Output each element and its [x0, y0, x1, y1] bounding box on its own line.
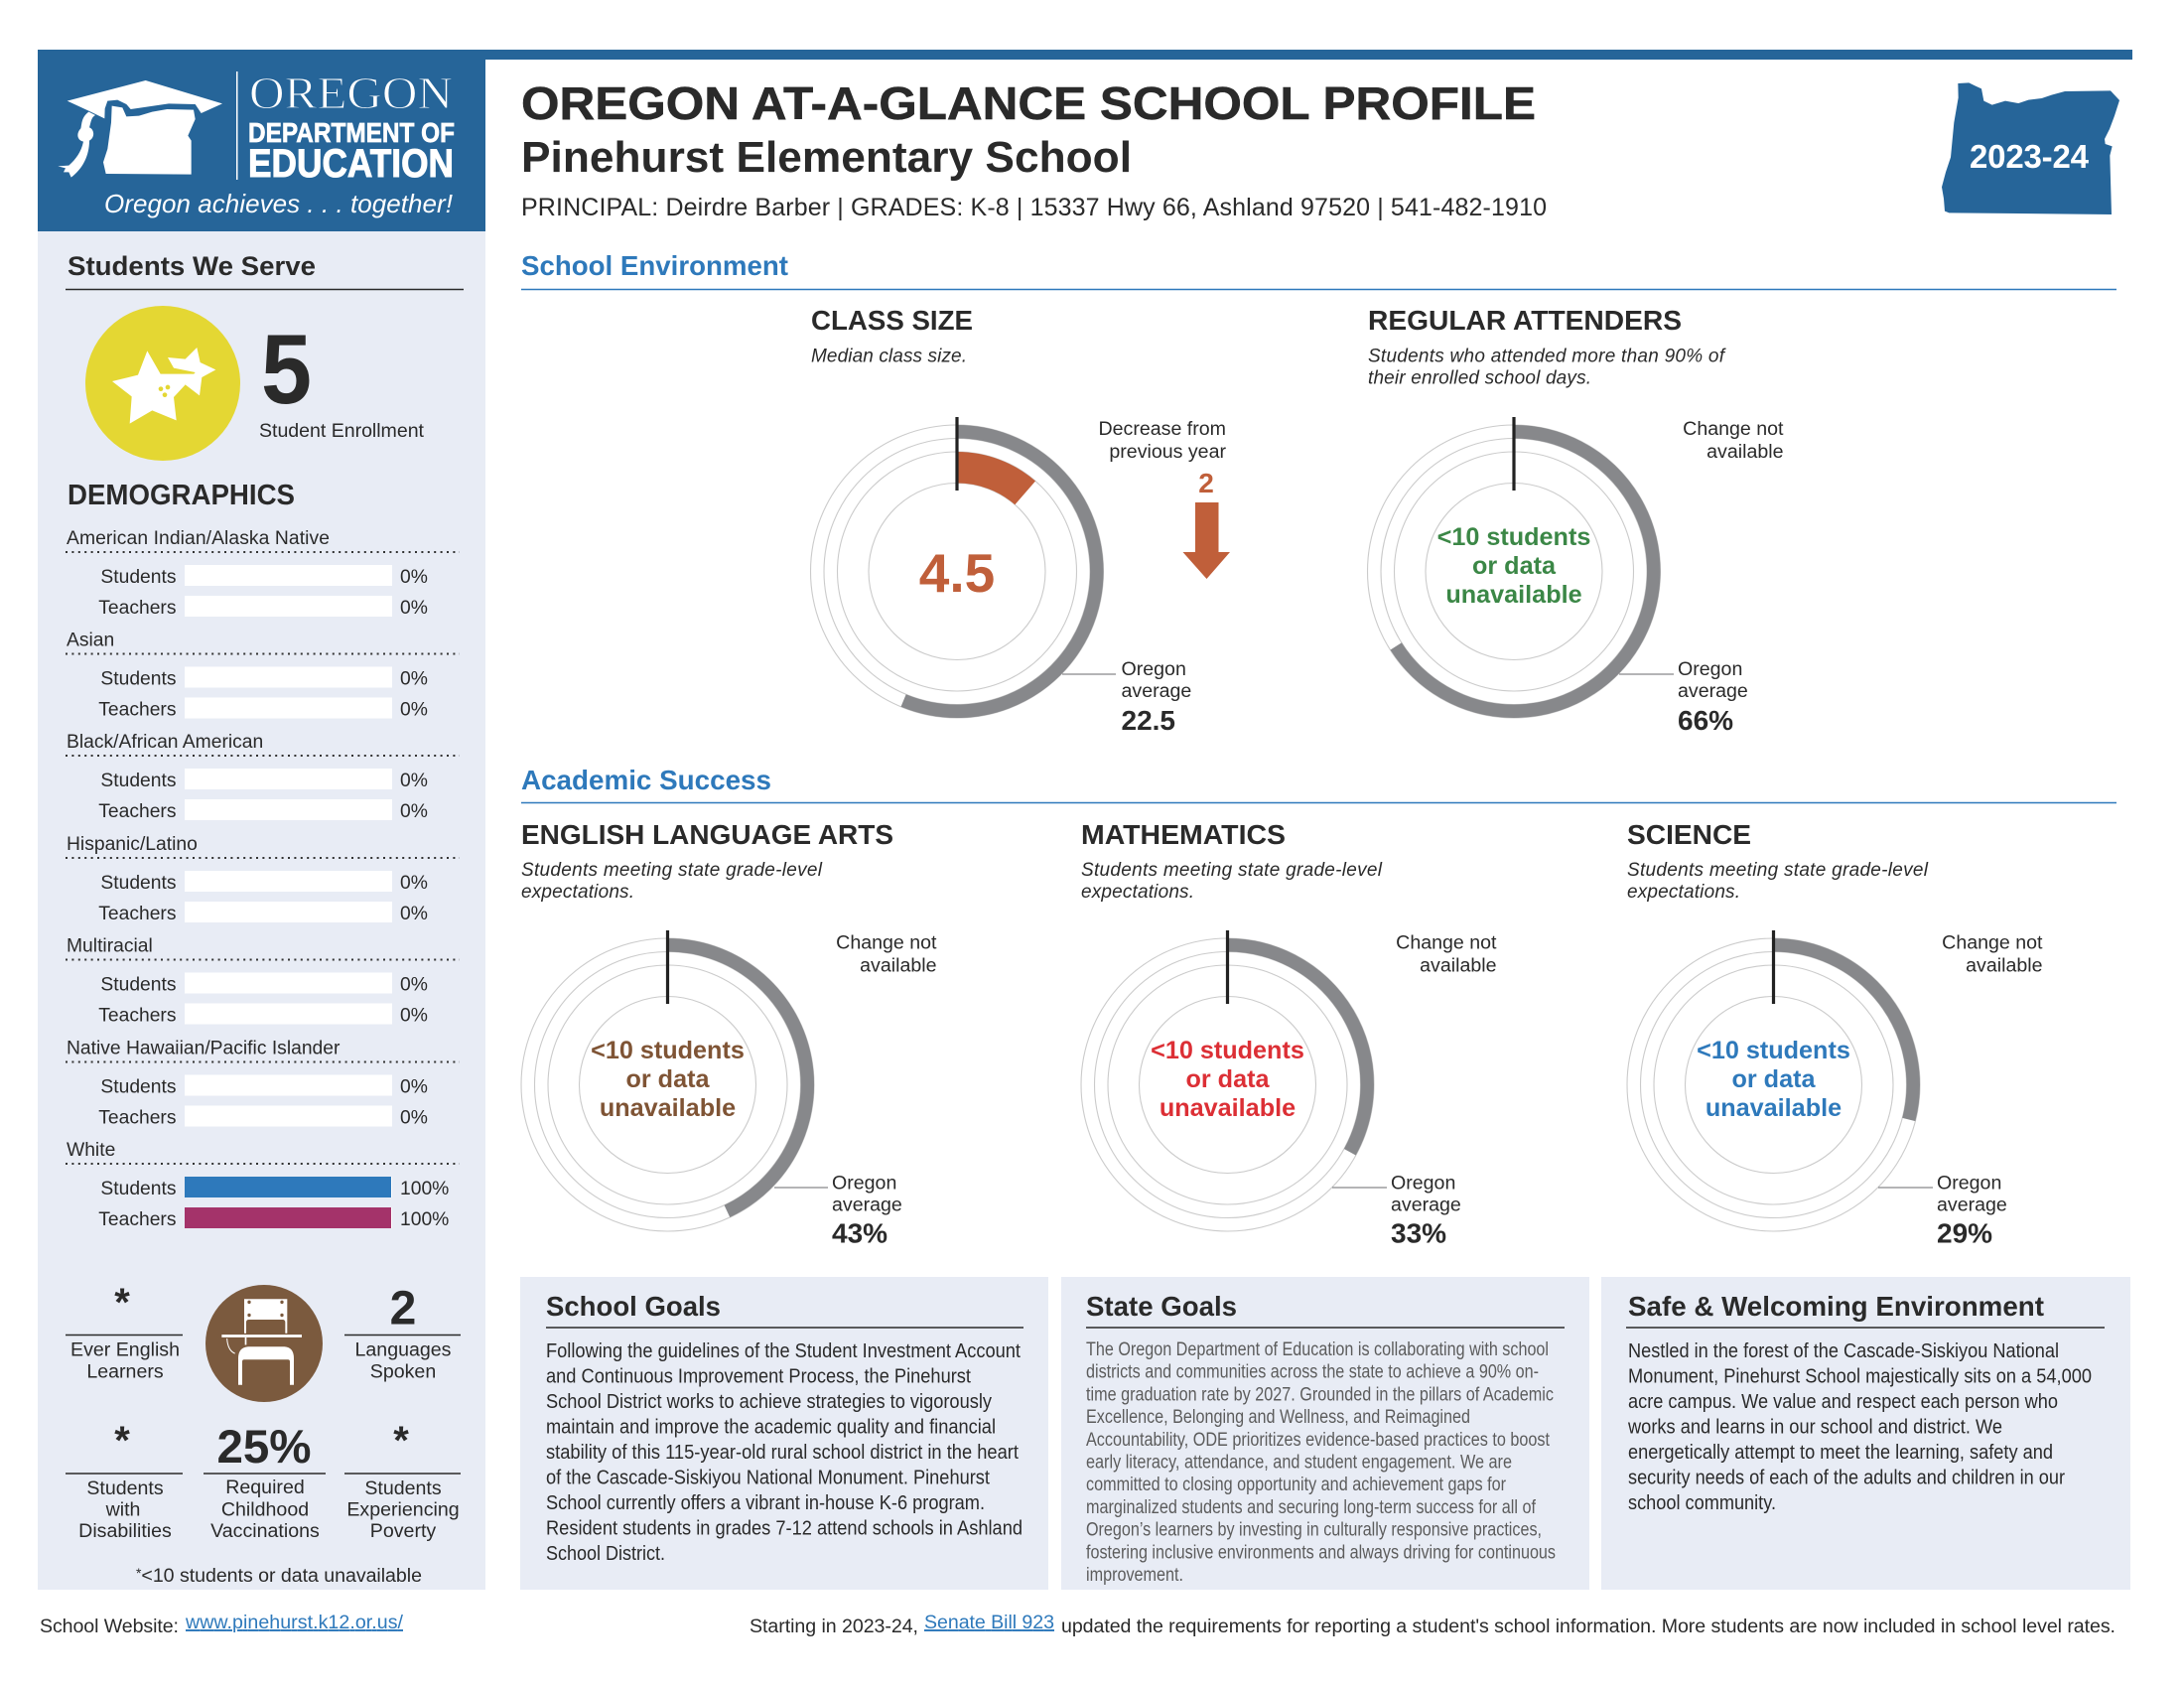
demographic: Black/African American: Students: [100, 771, 177, 791]
heading: Students We Serve: Students We Serve: [68, 251, 316, 281]
text: State Goals body: Oregon’s learners by investing in culturally responsive practices,: [1086, 1520, 1542, 1541]
demographic: Asian: 0%: [400, 669, 428, 689]
logo wordmark: Oregon: OREGON: [249, 68, 453, 118]
panel: regular attenders: [1368, 305, 1784, 736]
title: OREGON AT-A-GLANCE SCHOOL PROFILE: [521, 77, 1536, 129]
text: Safe and Welcoming body: acre campus. We value and respect each person who: [1628, 1391, 2058, 1413]
stat: Ever English Learners: *: [114, 1281, 130, 1325]
Oregon average: regular attenders: [1619, 658, 1748, 736]
Oregon average: science: average: [1937, 1194, 2007, 1215]
panel: State Goals: [1061, 1277, 1589, 1590]
radial gauge: class size: 4.5: [919, 542, 995, 604]
demographic: Multiracial: Multiracial: [67, 935, 153, 957]
Oregon average: science: [1878, 1172, 2007, 1249]
panel: Science: [1627, 819, 2043, 1249]
demographic: Multiracial: 0%: [400, 975, 428, 995]
demographic: White: 100%: [400, 1179, 449, 1199]
stat: Required Childhood Vaccinations: Childhood: [221, 1499, 309, 1521]
stat: Students with Disabilities: Disabilities: [78, 1520, 172, 1542]
radial gauge: mathematics: [1081, 930, 1374, 1231]
text: State Goals body: districts and communities across the state to achieve a 90% on-: [1086, 1362, 1539, 1383]
section rule: [521, 288, 2116, 290]
change label: mathematics: [1396, 931, 1497, 977]
Oregon average: ELA: average: [832, 1194, 902, 1215]
Oregon average: science: Oregon: [1937, 1172, 2001, 1194]
demographic: Native Hawaiian/Pacific Islander: Teachers: [98, 1108, 177, 1128]
Oregon average: class size: average: [1122, 680, 1191, 702]
stat: Students Experiencing Poverty: [344, 1419, 461, 1542]
icon: graduation cap with Oregon: [58, 80, 222, 178]
stat: Students Experiencing Poverty: *: [393, 1419, 409, 1463]
text: State Goals body: fostering inclusive environments and always driving for continuous: [1086, 1542, 1556, 1563]
demographic: Asian: Students: [100, 669, 177, 689]
description: science: Students meeting state grade-level: [1627, 860, 1929, 881]
stat: Languages Spoken: [344, 1283, 461, 1382]
text: School Goals body: and Continuous Improvement Process, the Pinehurst: [546, 1366, 971, 1388]
heading: ELA: ENGLISH LANGUAGE ARTS: [521, 819, 893, 850]
stat: Required Childhood Vaccinations: 25%: [216, 1421, 312, 1474]
description: mathematics: expectations.: [1081, 882, 1194, 903]
radial gauge: ELA: or data: [626, 1065, 710, 1093]
change label: regular attenders: [1683, 418, 1784, 463]
demographic: Hispanic/Latino: [66, 834, 460, 924]
text: School Goals body: School District works to achieve strategies to vigorously: [546, 1391, 992, 1413]
heading: science: SCIENCE: [1627, 819, 1751, 850]
heading rule: [66, 288, 464, 290]
text: State Goals body: time graduation rate by 2027. Grounded in the pillars of Academic: [1086, 1384, 1554, 1405]
radial gauge: regular attenders: <10 students: [1437, 523, 1590, 551]
radial gauge: science: [1627, 930, 1920, 1231]
text: State Goals body: The Oregon Department of Education is collaborating with school: [1086, 1339, 1549, 1360]
footnote: *: [136, 1565, 142, 1581]
stat: Ever English Learners: Learners: [86, 1360, 164, 1382]
Oregon average: regular attenders: average: [1678, 680, 1748, 702]
demographic: Native Hawaiian/Pacific Islander: 0%: [400, 1076, 428, 1098]
demographic: Black/African American: Black/African American: [67, 732, 263, 753]
logo wordmark: Education: EDUCATION: [248, 142, 454, 186]
Oregon average: ELA: [774, 1172, 902, 1249]
text: Safe and Welcoming body: security needs of each of the adults and children in our: [1628, 1468, 2065, 1489]
text: School Goals body: of the Cascade-Siskiyou National Monument. Pinehurst: [546, 1468, 990, 1489]
Oregon average: ELA: Oregon: [832, 1172, 896, 1194]
demographic: American Indian/Alaska Native: 0%: [400, 567, 428, 588]
heading: mathematics: MATHEMATICS: [1081, 819, 1286, 850]
description: mathematics: Students meeting state grade-level: [1081, 860, 1383, 881]
stat: Required Childhood Vaccinations: [204, 1421, 326, 1542]
demographic: Black/African American: [66, 732, 460, 822]
icon: brown circle with school chair: [205, 1285, 323, 1402]
stat: Students Experiencing Poverty: Poverty: [370, 1520, 436, 1542]
stat: Students with Disabilities: Students: [86, 1477, 164, 1499]
demographic: Asian: Asian: [67, 630, 114, 651]
badge: Oregon map with year: 2023-24: [1970, 138, 2090, 175]
change label: mathematics: available: [1420, 955, 1497, 977]
Oregon average: class size: 22.5: [1122, 705, 1175, 736]
change label: regular attenders: Change not: [1683, 418, 1784, 440]
Oregon average: mathematics: Oregon: [1391, 1172, 1455, 1194]
stat: enrollment label: Student Enrollment: [259, 420, 425, 442]
heading: School Goals: School Goals: [546, 1291, 721, 1322]
stat: Languages Spoken: 2: [390, 1283, 416, 1335]
description: ELA: Students meeting state grade-level: [521, 860, 823, 881]
description: class size: Median class size.: [811, 346, 967, 367]
radial gauge: ELA: <10 students: [591, 1037, 745, 1064]
change label: class size: Decrease from: [1098, 418, 1226, 440]
demographic: American Indian/Alaska Native: [66, 528, 460, 619]
Oregon average: class size: [1062, 658, 1191, 736]
radial gauge: mathematics: <10 students: [1151, 1037, 1304, 1064]
change label: mathematics: Change not: [1396, 931, 1497, 953]
change label: ELA: Change not: [836, 931, 937, 953]
change label: ELA: available: [860, 955, 937, 977]
footer: school website: School Website:: [40, 1616, 179, 1637]
footer: Senate Bill note: updated the requirements for reporting a student's school information. More students are now included in school level rates.: [1061, 1616, 2116, 1637]
stat: Languages Spoken: Languages: [355, 1338, 452, 1360]
text: School Goals body: School District.: [546, 1543, 665, 1565]
change label: class size: previous year: [1109, 441, 1226, 463]
demographic: Native Hawaiian/Pacific Islander: 0%: [400, 1108, 428, 1128]
demographic: Asian: 0%: [400, 699, 428, 721]
logo wordmark: Department of: DEPARTMENT OF: [248, 117, 455, 148]
stat: Students with Disabilities: [66, 1419, 183, 1542]
stat: enrollment number: 5: [261, 314, 312, 424]
demographic: White: Students: [100, 1179, 177, 1199]
change label: science: available: [1966, 955, 2043, 977]
text: Safe and Welcoming body: Nestled in the forest of the Cascade-Siskiyou National: [1628, 1340, 2059, 1362]
change label: regular attenders: available: [1706, 441, 1784, 463]
radial gauge: ELA: [521, 930, 814, 1231]
logo tagline: Oregon achieves . . . together!: [104, 189, 453, 218]
demographic: White: Teachers: [98, 1209, 177, 1230]
demographic: Native Hawaiian/Pacific Islander: [66, 1039, 460, 1128]
radial gauge: science: or data: [1732, 1065, 1816, 1093]
Oregon average: mathematics: 33%: [1391, 1217, 1446, 1249]
change label: class size: [1098, 418, 1226, 498]
demographic: Asian: [66, 630, 460, 721]
text: State Goals body: committed to closing opportunity and achievement gaps for: [1086, 1475, 1507, 1495]
demographic: American Indian/Alaska Native: Students: [100, 567, 177, 588]
radial gauge: science: <10 students: [1697, 1037, 1850, 1064]
footnote: <10 students or data unavailable: [141, 1565, 422, 1587]
demographic: Hispanic/Latino: Students: [100, 873, 177, 894]
heading: regular attenders: REGULAR ATTENDERS: [1368, 305, 1682, 336]
text: School Goals body: School currently offers a vibrant in-house K-6 program.: [546, 1492, 985, 1514]
text: State Goals body: Excellence, Belonging and Wellness, and Reimagined: [1086, 1407, 1470, 1428]
section rule: [521, 802, 2116, 804]
description: ELA: [521, 860, 823, 903]
demographic: Multiracial: [66, 935, 460, 1027]
text: State Goals body: Accountability, ODE prioritizes evidence-based practices to boost: [1086, 1430, 1551, 1451]
panel: logo header: [38, 50, 485, 231]
demographic: American Indian/Alaska Native: Teachers: [98, 598, 177, 619]
footer: Senate Bill note: Senate Bill 923: [924, 1612, 1054, 1633]
demographic: Multiracial: Students: [100, 975, 177, 995]
panel: sidebar background: [38, 231, 485, 1590]
stat: Students with Disabilities: with: [105, 1499, 140, 1521]
description: regular attenders: Students who attended more than 90% of: [1368, 346, 1726, 367]
footer: Senate Bill note: Starting in 2023-24,: [750, 1616, 918, 1637]
text: School Goals body: maintain and improve the academic quality and financial: [546, 1416, 996, 1438]
radial gauge: ELA: unavailable: [600, 1094, 736, 1122]
section heading: School Environment: School Environment: [521, 250, 788, 281]
radial gauge: mathematics: or data: [1186, 1065, 1270, 1093]
text: School Goals body: Resident students in grades 7-12 attend schools in Ashland: [546, 1517, 1023, 1539]
demographic: Multiracial: Teachers: [98, 1005, 177, 1027]
stat: Students with Disabilities: *: [114, 1419, 130, 1463]
stat: Ever English Learners: [66, 1281, 183, 1382]
text: State Goals body: marginalized students and securing long-term success for all of: [1086, 1497, 1537, 1518]
Oregon average: mathematics: average: [1391, 1194, 1461, 1215]
panel: Safe and Welcoming Environment: [1601, 1277, 2130, 1590]
demographic: Black/African American: 0%: [400, 771, 428, 791]
stat: Students Experiencing Poverty: Experiencing: [346, 1499, 460, 1521]
demographic: Asian: Teachers: [98, 699, 177, 721]
Oregon average: regular attenders: 66%: [1678, 705, 1733, 736]
stat: Ever English Learners: Ever English: [70, 1338, 180, 1360]
change label: class size: 2: [1198, 468, 1214, 498]
radial gauge: class size: [810, 417, 1104, 718]
description: regular attenders: their enrolled school days.: [1368, 367, 1591, 389]
Oregon average: class size: Oregon: [1122, 658, 1186, 680]
Oregon average: ELA: 43%: [832, 1217, 887, 1249]
radial gauge: science: unavailable: [1706, 1094, 1842, 1122]
demographic: Black/African American: Teachers: [98, 801, 177, 822]
footer: school website: www.pinehurst.k12.or.us/: [185, 1612, 404, 1633]
school name: Pinehurst Elementary School: [521, 133, 1132, 182]
school details: PRINCIPAL: Deirdre Barber | GRADES: K-8 | 15337 Hwy 66, Ashland 97520 | 541-482-1910: [521, 194, 1547, 221]
demographic: Multiracial: 0%: [400, 1005, 428, 1027]
stat: Required Childhood Vaccinations: Vaccinations: [210, 1520, 320, 1542]
demographic: American Indian/Alaska Native: American Indian/Alaska Native: [67, 528, 330, 549]
Oregon average: regular attenders: Oregon: [1678, 658, 1742, 680]
panel: Mathematics: [1081, 819, 1497, 1249]
heading: class size: CLASS SIZE: [811, 305, 973, 336]
demographic: White: [66, 1140, 460, 1230]
text: School Goals body: [546, 1340, 1023, 1565]
change label: science: [1942, 931, 2043, 977]
stat: Languages Spoken: Spoken: [370, 1360, 436, 1382]
footer: school website: [40, 1612, 404, 1637]
demographic: Native Hawaiian/Pacific Islander: Students: [100, 1076, 177, 1098]
demographic: Hispanic/Latino: Hispanic/Latino: [67, 834, 198, 855]
text: Safe and Welcoming body: Monument, Pinehurst School majestically sits on a 54,000: [1628, 1366, 2092, 1388]
description: science: expectations.: [1627, 882, 1740, 903]
demographic: Native Hawaiian/Pacific Islander: Native Hawaiian/Pacific Islander: [67, 1039, 341, 1058]
stat: Required Childhood Vaccinations: Required: [225, 1477, 305, 1498]
demographic: Black/African American: 0%: [400, 801, 428, 822]
text: Safe and Welcoming body: works and learns in our school and district. We: [1627, 1416, 2002, 1438]
demographic: American Indian/Alaska Native: 0%: [400, 598, 428, 619]
demographic: Hispanic/Latino: 0%: [400, 904, 428, 924]
change label: ELA: [836, 931, 937, 977]
radial gauge: regular attenders: unavailable: [1445, 581, 1582, 609]
footer: Senate Bill note: [750, 1612, 2116, 1637]
text: Safe and Welcoming body: energetically attempt to meet the learning, safety and: [1628, 1442, 2053, 1464]
stat: Students Experiencing Poverty: Students: [364, 1477, 442, 1499]
top blue bar: [38, 50, 2132, 60]
heading: Safe and Welcoming: Safe & Welcoming Environment: [1628, 1291, 2044, 1322]
description: regular attenders: [1368, 346, 1726, 389]
text: State Goals body: early literacy, attendance, and student engagement. We are: [1086, 1452, 1512, 1474]
logo divider: [236, 71, 238, 180]
heading: Demographics: DEMOGRAPHICS: [68, 480, 295, 511]
text: School Goals body: stability of this 115-year-old rural school district in the heart: [546, 1442, 1019, 1464]
description: mathematics: [1081, 860, 1383, 903]
Oregon average: mathematics: [1332, 1172, 1461, 1249]
text: State Goals body: [1086, 1339, 1556, 1586]
change label: science: Change not: [1942, 931, 2043, 953]
demographic: Hispanic/Latino: 0%: [400, 873, 428, 894]
radial gauge: mathematics: unavailable: [1160, 1094, 1296, 1122]
radial gauge: regular attenders: or data: [1472, 552, 1557, 580]
text: Safe and Welcoming body: school community.: [1628, 1492, 1776, 1514]
description: science: [1627, 860, 1929, 903]
arrow: decrease: [1183, 502, 1230, 579]
description: ELA: expectations.: [521, 882, 634, 903]
panel: English Language Arts: [521, 819, 937, 1249]
heading: State Goals: State Goals: [1086, 1291, 1237, 1322]
text: State Goals body: improvement.: [1086, 1565, 1183, 1586]
panel: class size: [810, 305, 1230, 736]
radial gauge: regular attenders: [1368, 417, 1660, 718]
text: Safe and Welcoming body: [1627, 1340, 2092, 1514]
panel: School Goals: [520, 1277, 1048, 1590]
Oregon average: science: 29%: [1937, 1217, 1992, 1249]
demographic: Hispanic/Latino: Teachers: [98, 904, 177, 924]
text: School Goals body: Following the guidelines of the Student Investment Account: [546, 1340, 1021, 1362]
badge: Oregon map with year: [1942, 82, 2119, 214]
section heading: Academic Success: Academic Success: [521, 765, 771, 795]
icon: yellow circle with stars: [85, 306, 240, 461]
demographic: White: 100%: [400, 1209, 449, 1230]
demographic: White: White: [67, 1140, 115, 1161]
